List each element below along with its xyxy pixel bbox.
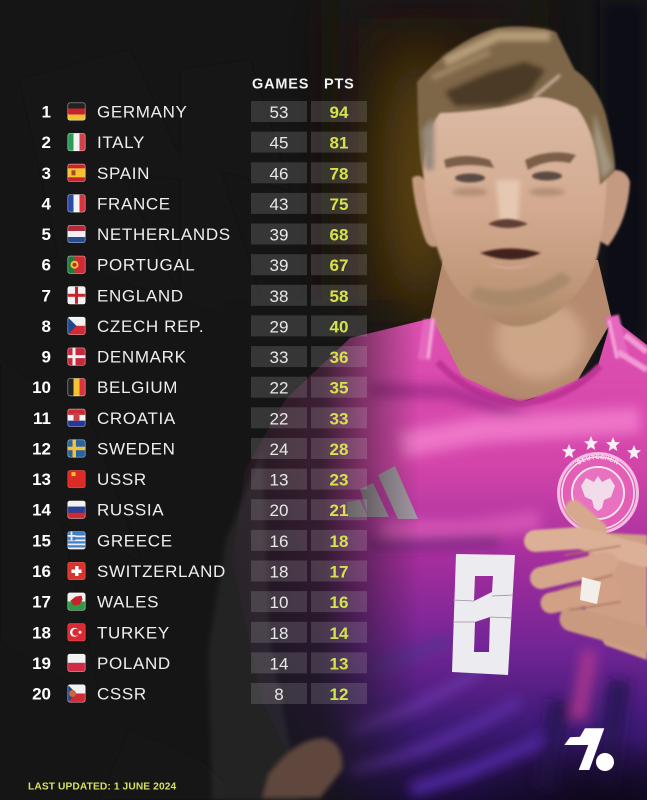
row 11 Croatia: 33 <box>330 409 348 428</box>
row 6 Portugal <box>42 254 367 275</box>
row 18 Turkey: 18 <box>32 623 51 642</box>
row 14 Russia <box>32 499 367 520</box>
forearm hand bottom <box>262 738 342 798</box>
row 7 England: ENGLAND <box>97 286 184 305</box>
row 19 Poland <box>32 652 367 673</box>
row 8 Czech Rep.: 40 <box>330 317 348 336</box>
row 6 Portugal: 39 <box>270 256 288 275</box>
row 4 France: 4 <box>42 194 52 213</box>
row 17 Wales: 16 <box>330 593 348 612</box>
row 17 Wales <box>32 591 367 612</box>
row 11 Croatia: 22 <box>270 409 288 428</box>
row 6 Portugal: 67 <box>330 256 348 275</box>
row 1 Germany: 1 <box>42 102 51 122</box>
shirt number 8 <box>452 554 515 675</box>
photo: footballer <box>209 25 647 800</box>
row 2 Italy: 81 <box>330 134 348 153</box>
row 2 Italy <box>42 132 367 153</box>
row 10 Belgium: 35 <box>330 379 348 398</box>
row 3 Spain: 78 <box>330 164 348 183</box>
row 5 Netherlands <box>42 224 367 244</box>
column headings: PTS <box>324 76 355 92</box>
row 4 France: 75 <box>330 195 348 214</box>
row 18 Turkey <box>32 622 367 643</box>
row 13 USSR: 23 <box>330 471 348 490</box>
row 2 Italy: ITALY <box>97 133 145 152</box>
row 1 Germany <box>42 101 367 122</box>
row 11 Croatia <box>33 407 367 428</box>
row 15 Greece <box>32 530 367 551</box>
row 8 Czech Rep. <box>42 315 367 336</box>
row 15 Greece: 16 <box>270 532 288 551</box>
row 7 England: 58 <box>330 287 348 306</box>
logo: OneFootball <box>564 728 614 771</box>
hair <box>417 26 615 185</box>
row 3 Spain <box>42 162 367 183</box>
row 17 Wales: 17 <box>32 593 51 612</box>
row 7 England <box>42 285 367 306</box>
collar <box>424 316 622 404</box>
row 20 CSSR: 8 <box>274 685 284 704</box>
row 19 Poland: 19 <box>32 654 51 673</box>
row 17 Wales: 10 <box>270 593 288 612</box>
row 20 CSSR: 12 <box>330 685 348 704</box>
row 19 Poland: POLAND <box>97 654 171 673</box>
row 14 Russia: RUSSIA <box>97 501 164 520</box>
row 16 Switzerland <box>32 560 367 582</box>
row 20 CSSR: 20 <box>32 684 51 704</box>
row 3 Spain: 46 <box>270 164 288 183</box>
row 18 Turkey: TURKEY <box>97 623 170 642</box>
row 3 Spain: 3 <box>42 164 51 183</box>
row 13 USSR: USSR <box>97 470 147 489</box>
row 12 Sweden: SWEDEN <box>97 440 176 458</box>
finger tape <box>580 577 601 604</box>
row 16 Switzerland: 16 <box>32 562 51 581</box>
row 1 Germany: GERMANY <box>97 102 188 122</box>
row 16 Switzerland: 17 <box>330 562 348 582</box>
row 4 France: 43 <box>270 195 288 214</box>
row 6 Portugal: PORTUGAL <box>97 256 195 275</box>
column headings: GAMES <box>252 76 309 92</box>
hand <box>535 509 647 660</box>
DFB crest: DEUTSCHER <box>577 454 618 465</box>
row 12 Sweden <box>32 438 367 459</box>
row 7 England: 38 <box>270 287 288 306</box>
row 8 Czech Rep.: 29 <box>270 317 288 336</box>
row 19 Poland: 14 <box>270 654 288 673</box>
row 4 France: FRANCE <box>97 194 171 213</box>
row 5 Netherlands: 68 <box>330 226 348 244</box>
row 13 USSR: 13 <box>32 470 51 489</box>
row 11 Croatia: CROATIA <box>97 409 176 428</box>
row 9 Denmark <box>42 346 367 367</box>
row 15 Greece: 15 <box>32 531 51 550</box>
column headings <box>252 76 355 92</box>
adidas logo <box>347 466 418 519</box>
row 10 Belgium: 10 <box>32 378 51 397</box>
jersey folds <box>350 390 640 790</box>
ears <box>412 170 630 247</box>
footer: last updated: LAST UPDATED: 1 JUNE 2024 <box>28 782 177 792</box>
row 9 Denmark: 36 <box>330 348 348 367</box>
face <box>421 94 607 326</box>
row 1 Germany: 94 <box>330 103 349 122</box>
row 20 CSSR <box>32 683 367 704</box>
row 16 Switzerland: 18 <box>270 562 288 582</box>
row 4 France <box>42 193 367 214</box>
jersey <box>232 318 647 800</box>
row 16 Switzerland: SWITZERLAND <box>97 562 226 581</box>
row 11 Croatia: 11 <box>33 409 51 428</box>
row 14 Russia: 20 <box>270 501 288 520</box>
row 17 Wales: WALES <box>97 593 159 612</box>
row 6 Portugal: 6 <box>42 256 51 275</box>
neck highlight <box>495 300 585 380</box>
row 10 Belgium: 22 <box>270 379 288 398</box>
row 1 Germany: 53 <box>270 103 288 122</box>
shoulder stripes <box>618 335 647 370</box>
facial features <box>444 152 576 307</box>
row 19 Poland: 13 <box>330 654 348 673</box>
row 18 Turkey: 14 <box>330 624 349 643</box>
row 8 Czech Rep.: 8 <box>42 317 51 336</box>
row 15 Greece: 18 <box>330 532 348 551</box>
row 12 Sweden: 12 <box>32 440 51 458</box>
neck <box>430 260 612 402</box>
row 13 USSR <box>32 469 367 490</box>
row 8 Czech Rep.: CZECH REP. <box>97 317 204 336</box>
row 15 Greece: GREECE <box>97 531 173 550</box>
row 10 Belgium: BELGIUM <box>97 378 178 397</box>
row 20 CSSR: CSSR <box>97 684 147 704</box>
row 2 Italy: 2 <box>42 133 51 152</box>
row 12 Sweden: 28 <box>330 440 348 459</box>
row 5 Netherlands: 5 <box>42 225 51 244</box>
left arm <box>208 450 300 800</box>
row 9 Denmark: 33 <box>270 348 288 367</box>
row 9 Denmark: 9 <box>42 348 51 367</box>
row 5 Netherlands: 39 <box>270 226 288 244</box>
row 7 England: 7 <box>42 286 51 305</box>
row 9 Denmark: DENMARK <box>97 348 187 367</box>
row 2 Italy: 45 <box>270 134 288 153</box>
dark lower right corner <box>470 720 647 800</box>
row 10 Belgium <box>32 377 367 398</box>
row 5 Netherlands: NETHERLANDS <box>97 225 231 244</box>
dark fade over photo <box>225 300 420 800</box>
row 13 USSR: 13 <box>270 471 288 490</box>
league table <box>32 101 367 704</box>
row 18 Turkey: 18 <box>270 624 288 643</box>
DFB crest <box>557 452 639 533</box>
row 14 Russia: 21 <box>330 501 348 520</box>
row 3 Spain: SPAIN <box>97 164 150 183</box>
row 14 Russia: 14 <box>32 501 52 520</box>
stars <box>562 436 641 459</box>
row 12 Sweden: 24 <box>270 440 288 459</box>
